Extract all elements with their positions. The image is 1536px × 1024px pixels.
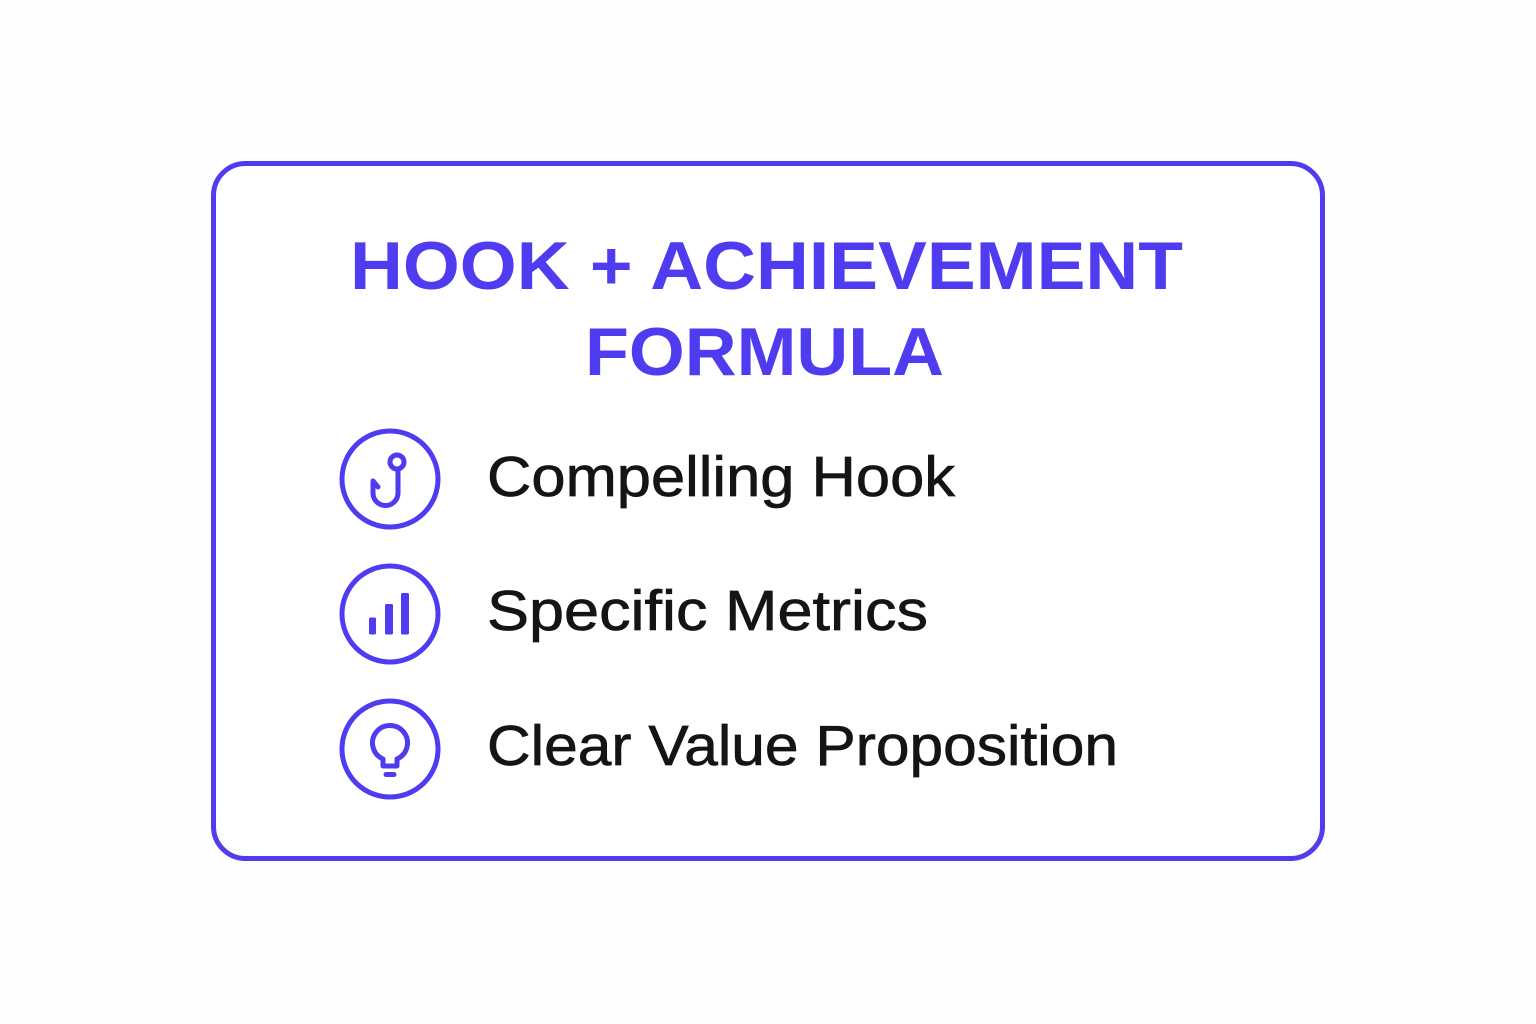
icon: fish hook [342, 431, 438, 527]
row: clear value proposition [342, 701, 1118, 797]
row: compelling hook [342, 431, 956, 527]
label: compelling hook: Compelling Hook [487, 445, 956, 509]
label: clear value proposition: Clear Value Proposition [487, 714, 1118, 778]
row: specific metrics [342, 566, 928, 662]
icon: bar chart [342, 566, 438, 662]
icon: light bulb [342, 701, 438, 797]
title: FORMULA [585, 314, 944, 390]
title: HOOK + ACHIEVEMENT [350, 228, 1183, 304]
panel: formula card [214, 164, 1322, 858]
label: specific metrics: Specific Metrics [487, 579, 928, 643]
title [350, 228, 1183, 390]
